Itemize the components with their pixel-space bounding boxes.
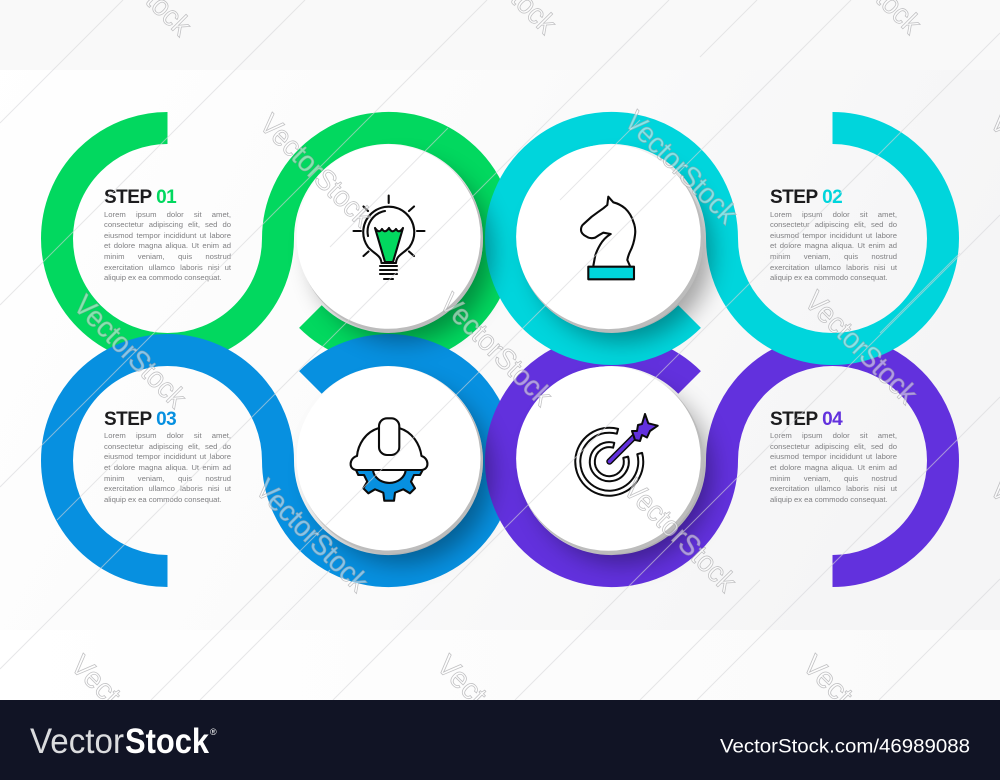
text block: step 04: minim veniam, quis nostrud — [770, 474, 897, 483]
text block: step 04: et dolore magna aliqua. Ut enim ad — [770, 463, 897, 472]
disc: step 01 — [296, 145, 483, 332]
text block: step 02: consectetur adipiscing elit, sed do — [770, 220, 897, 229]
ring: step 01 green — [57, 128, 499, 349]
disc shadows — [312, 162, 712, 564]
icon: chess knight — [581, 197, 635, 279]
text block: step 01: eiusmod tempor incididunt ut labore — [104, 231, 231, 240]
ring: step 04 purple — [501, 350, 943, 571]
text block: step 03: Lorem ipsum dolor sit amet, — [104, 431, 231, 440]
text block: step 03 — [104, 408, 231, 504]
ring: step 02 cyan — [501, 128, 943, 349]
text block: step 02: minim veniam, quis nostrud — [770, 252, 897, 261]
text block: step 04: exercitation ullamco laboris nisi ut — [770, 484, 897, 493]
text block: step 02: STEP 02 — [770, 187, 842, 208]
icon: light bulb — [354, 196, 424, 279]
footer logo — [30, 722, 217, 761]
footer logo: ® — [210, 727, 217, 737]
footer logo: Vector — [30, 722, 124, 761]
text block: step 04: aliquip ex ea commodo consequat. — [770, 495, 888, 504]
text block: step 03: et dolore magna aliqua. Ut enim ad — [104, 463, 231, 472]
text block: step 02: Lorem ipsum dolor sit amet, — [770, 210, 897, 218]
text block: step 01: exercitation ullamco laboris nisi ut — [104, 263, 231, 272]
text block: step 04: eiusmod tempor incididunt ut labore — [770, 452, 897, 461]
text block: step 01: aliquip ex ea commodo consequat. — [104, 273, 222, 282]
text block: step 03: minim veniam, quis nostrud — [104, 474, 231, 483]
text block: step 01: consectetur adipiscing elit, sed do — [104, 220, 231, 229]
watermarks: Vect — [796, 649, 859, 712]
watermarks: VectorStock — [249, 473, 375, 599]
icon: target and arrow — [575, 414, 658, 496]
text block: step 01: et dolore magna aliqua. Ut enim ad — [104, 241, 231, 250]
text block: step 02 — [770, 187, 897, 282]
footer image id: VectorStock.com/46989088 — [720, 736, 970, 758]
watermarks: Vect — [430, 649, 493, 712]
text block: step 04: consectetur adipiscing elit, sed do — [770, 442, 897, 451]
disc: step 04 — [516, 366, 704, 554]
text block: step 04: STEP 04 — [770, 408, 842, 430]
text block: step 01: Lorem ipsum dolor sit amet, — [104, 210, 231, 218]
text block: step 01: minim veniam, quis nostrud — [104, 252, 231, 261]
text block: step 03: aliquip ex ea commodo consequat. — [104, 495, 222, 504]
footer logo: Stock — [125, 722, 209, 761]
watermarks: Vect — [64, 649, 127, 712]
text block: step 02: exercitation ullamco laboris nisi ut — [770, 263, 897, 272]
footer bar — [0, 700, 1000, 780]
icon: hard hat and gear — [351, 418, 427, 501]
text block: step 01 — [104, 187, 231, 282]
text block: step 03: exercitation ullamco laboris nisi ut — [104, 484, 231, 493]
ring: step 03 blue — [57, 350, 499, 571]
watermarks: VectorStock — [433, 287, 559, 413]
text block: step 02: aliquip ex ea commodo consequat. — [770, 273, 888, 282]
watermarks: VectorStock — [798, 285, 924, 411]
text block: step 03: consectetur adipiscing elit, sed do — [104, 442, 231, 451]
disc: step 02 — [516, 144, 704, 332]
watermarks: VectorStock — [67, 289, 193, 415]
text block: step 02: eiusmod tempor incididunt ut labore — [770, 231, 897, 240]
text block: step 03: STEP 03 — [104, 408, 176, 430]
text block: step 04: Lorem ipsum dolor sit amet, — [770, 431, 897, 440]
text block: step 03: eiusmod tempor incididunt ut labore — [104, 452, 231, 461]
text block: step 02: et dolore magna aliqua. Ut enim ad — [770, 241, 897, 250]
text block: step 01: STEP 01 — [104, 187, 176, 208]
watermarks: VectorStock — [617, 473, 743, 599]
watermarks: VectorStock — [618, 105, 744, 231]
disc: step 03 — [296, 366, 483, 554]
watermarks: VectorStock — [253, 108, 379, 234]
text block: step 04 — [770, 408, 897, 504]
